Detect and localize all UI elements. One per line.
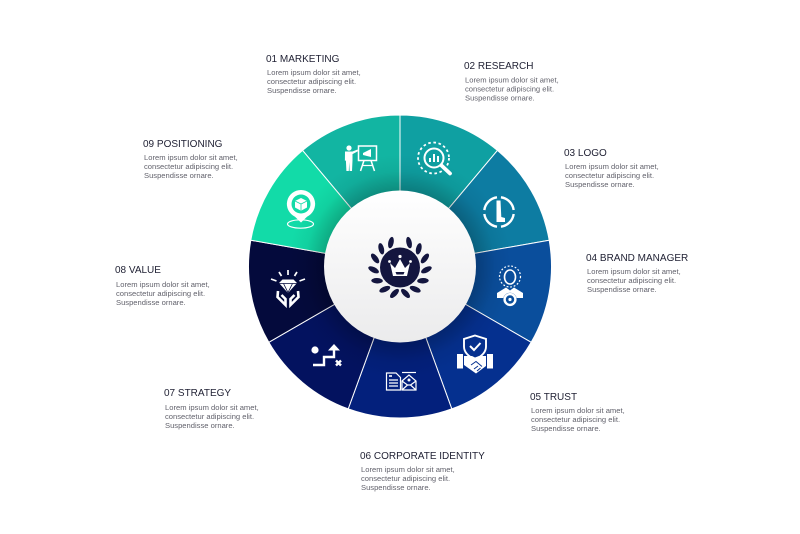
label: 06 corporate identity: consectetur adipiscing elit. — [361, 474, 450, 483]
label: 05 trust: Suspendisse ornare. — [531, 424, 601, 433]
label: 08 value: Suspendisse ornare. — [116, 298, 186, 307]
icon: logo ring — [484, 197, 514, 227]
label: 04 brand manager: Lorem ipsum dolor sit amet, — [587, 267, 681, 276]
label: 09 positioning — [143, 139, 238, 180]
donut chart — [248, 115, 552, 418]
segment 01 marketing — [303, 115, 400, 266]
label: 02 research: Lorem ipsum dolor sit amet, — [465, 76, 559, 84]
label: 07 strategy: Suspendisse ornare. — [165, 421, 235, 430]
label: 09 positioning: 09 POSITIONING — [143, 139, 223, 150]
icon: crown laurel — [367, 236, 433, 299]
segment 08 value — [248, 240, 400, 342]
icon: strategy steps — [311, 344, 341, 366]
label: 01 marketing: Lorem ipsum dolor sit amet, — [267, 68, 361, 77]
label: 08 value: Lorem ipsum dolor sit amet, — [116, 280, 210, 289]
label: 08 value: consectetur adipiscing elit. — [116, 289, 205, 298]
icon: shield and handshake — [457, 336, 493, 374]
label: 06 corporate identity: Suspendisse ornare. — [361, 483, 431, 492]
segment 02 research — [400, 115, 497, 266]
label: 08 value: 08 VALUE — [115, 265, 161, 276]
label: 02 research — [464, 61, 559, 102]
label: 04 brand manager: consectetur adipiscing elit. — [587, 276, 676, 285]
label: 07 strategy — [164, 388, 259, 430]
label: 07 strategy: Lorem ipsum dolor sit amet, — [165, 403, 259, 412]
label: 04 brand manager: 04 BRAND MANAGER — [586, 253, 688, 264]
icon: diamond in hands — [271, 270, 305, 305]
label: 08 value — [115, 265, 210, 307]
label: 02 research: Suspendisse ornare. — [465, 94, 535, 102]
label: 07 strategy: consectetur adipiscing elit. — [165, 412, 254, 421]
segment 06 corporate identity — [348, 266, 452, 418]
label: 02 research: consectetur adipiscing elit. — [465, 84, 554, 94]
icon: magnifier with chart — [418, 142, 450, 174]
label: 01 marketing: Suspendisse ornare. — [267, 86, 337, 95]
label: 05 trust: 05 TRUST — [530, 392, 577, 403]
segment 04 brand manager — [400, 240, 552, 342]
segment 03 logo — [400, 150, 549, 266]
label: 04 brand manager: Suspendisse ornare. — [587, 285, 657, 294]
icon: brand manager — [497, 266, 523, 306]
label: 01 marketing — [266, 54, 361, 95]
label: 03 logo: Suspendisse ornare. — [565, 180, 635, 189]
label: 05 trust — [530, 392, 625, 433]
label: 07 strategy: 07 STRATEGY — [164, 388, 231, 399]
label: 09 positioning: Lorem ipsum dolor sit amet, — [144, 153, 238, 162]
icon: location pin with cube — [287, 190, 315, 228]
label: 09 positioning: Suspendisse ornare. — [144, 171, 214, 180]
icon: document and envelope — [386, 372, 416, 390]
label: 05 trust: Lorem ipsum dolor sit amet, — [531, 406, 625, 415]
label: 03 logo: consectetur adipiscing elit. — [565, 171, 654, 180]
label: 01 marketing: 01 MARKETING — [266, 54, 340, 65]
label: 03 logo — [564, 148, 659, 189]
label: 04 brand manager — [586, 253, 688, 294]
label: 06 corporate identity: Lorem ipsum dolor sit amet, — [361, 465, 455, 474]
label: 05 trust: consectetur adipiscing elit. — [531, 415, 620, 424]
label: 06 corporate identity: 06 CORPORATE IDENTITY — [360, 451, 485, 462]
label: 03 logo: 03 LOGO — [564, 148, 607, 159]
segment 07 strategy — [269, 266, 400, 409]
label: 09 positioning: consectetur adipiscing elit. — [144, 162, 233, 171]
center circle — [324, 190, 476, 342]
label: 02 research: 02 RESEARCH — [464, 61, 533, 72]
icon: presenter with board — [345, 145, 376, 171]
segment 09 positioning — [251, 150, 400, 266]
segment 05 trust — [400, 266, 531, 409]
label: 01 marketing: consectetur adipiscing elit. — [267, 77, 356, 86]
label: 06 corporate identity — [360, 451, 485, 492]
label: 03 logo: Lorem ipsum dolor sit amet, — [565, 162, 659, 171]
